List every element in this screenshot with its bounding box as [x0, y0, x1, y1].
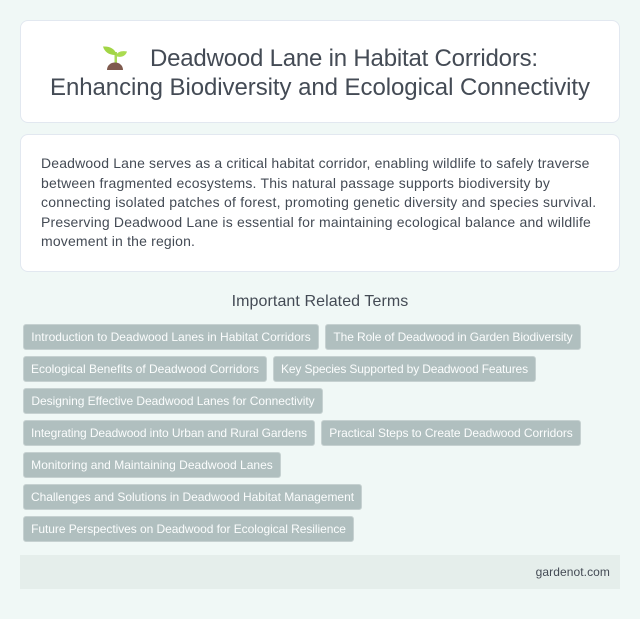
chip: Challenges and Solutions in Deadwood Habitat Management: [31, 490, 354, 504]
header panel: [20, 20, 620, 123]
section heading: Important Related Terms: [232, 293, 408, 310]
chip: [321, 420, 581, 446]
chip: [23, 420, 315, 446]
chip: Integrating Deadwood into Urban and Rural Gardens: [31, 426, 307, 440]
chip: [23, 388, 323, 414]
chip: [23, 324, 319, 350]
chip: Designing Effective Deadwood Lanes for Connectivity: [31, 394, 315, 408]
chip: [325, 324, 581, 350]
title: [50, 45, 590, 101]
icon: seedling: [103, 46, 127, 70]
chip: The Role of Deadwood in Garden Biodiversity: [333, 330, 573, 344]
chip: Key Species Supported by Deadwood Features: [281, 362, 528, 376]
intro text: [41, 155, 596, 249]
chip: Monitoring and Maintaining Deadwood Lanes: [31, 458, 273, 472]
chip: Future Perspectives on Deadwood for Ecological Resilience: [31, 522, 346, 536]
footer credit: gardenot.com: [536, 565, 610, 579]
chip: [23, 484, 362, 510]
related terms chips: [23, 324, 581, 542]
chip: [23, 452, 281, 478]
intro text: Preserving Deadwood Lane is essential for maintaining ecological balance and wildlife: [41, 214, 591, 230]
intro panel: [20, 134, 620, 272]
title: Enhancing Biodiversity and Ecological Connectivity: [50, 74, 590, 101]
chip: Ecological Benefits of Deadwood Corridors: [31, 362, 259, 376]
intro text: connecting isolated patches of forest, promoting genetic diversity and species survival.: [41, 194, 596, 210]
chip: Introduction to Deadwood Lanes in Habitat Corridors: [31, 330, 311, 344]
chip: [273, 356, 536, 382]
chip: [23, 356, 267, 382]
intro text: between fragmented ecosystems. This natural passage supports biodiversity by: [41, 175, 550, 191]
title: Deadwood Lane in Habitat Corridors:: [150, 45, 538, 72]
chip: Practical Steps to Create Deadwood Corridors: [329, 426, 573, 440]
intro text: Deadwood Lane serves as a critical habitat corridor, enabling wildlife to safely traverse: [41, 155, 590, 171]
chip: [23, 516, 354, 542]
footer bar: [20, 555, 620, 589]
intro text: movement in the region.: [41, 233, 195, 249]
